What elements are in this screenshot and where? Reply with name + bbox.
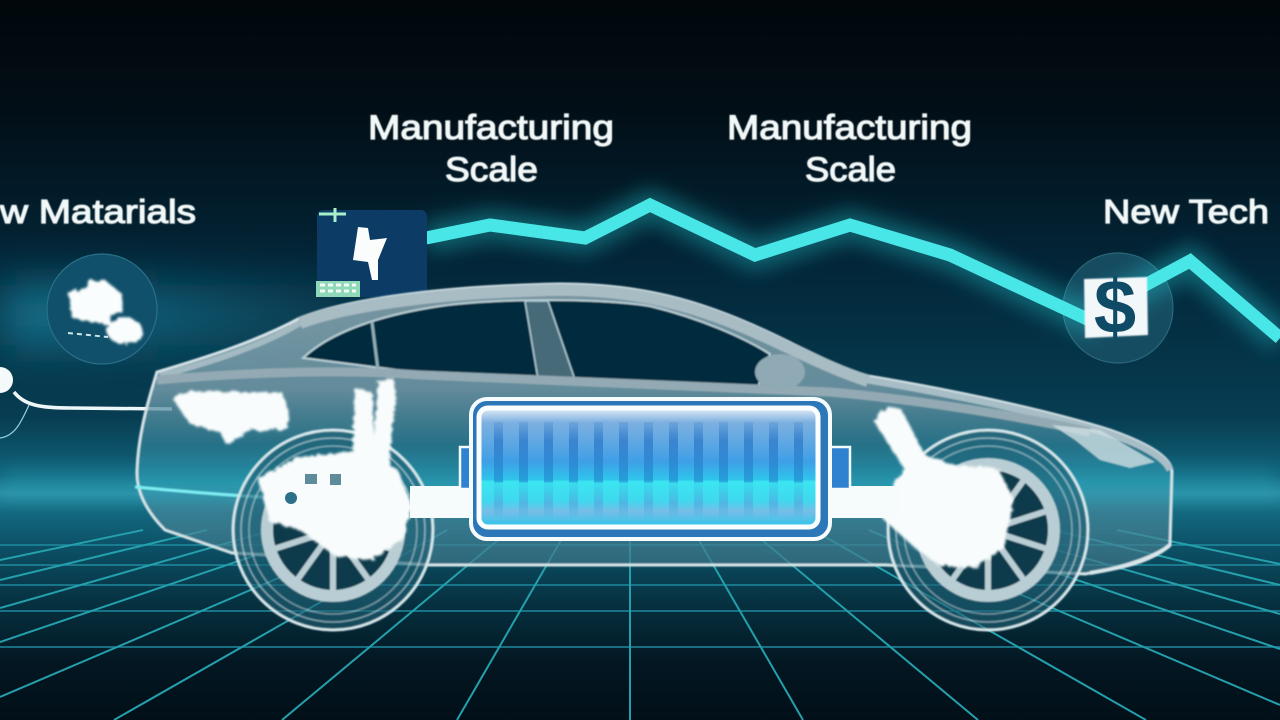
heading: new materials: w Matarials bbox=[0, 193, 196, 230]
car: window pillars bbox=[525, 301, 575, 380]
front suspension parts bbox=[873, 406, 1014, 568]
heading: manufacturing scale left bbox=[368, 109, 614, 189]
heading: manufacturing scale left: Manufacturing bbox=[368, 109, 614, 147]
car: front bumper bbox=[1090, 545, 1170, 573]
battery pack bbox=[460, 399, 850, 539]
axles bbox=[410, 486, 900, 518]
car: hood band bbox=[868, 380, 1170, 470]
rear wheel bbox=[233, 430, 433, 630]
icon: lightning bolt card bbox=[316, 208, 427, 297]
car: rear deck band bbox=[160, 323, 300, 376]
hub cut-outs bbox=[285, 474, 341, 504]
car: body bbox=[135, 284, 1172, 574]
perspective grid floor bbox=[0, 530, 1280, 720]
dollar icon circle bbox=[1063, 253, 1173, 363]
car: window bbox=[303, 300, 770, 387]
icon: dollar sign bbox=[1084, 265, 1148, 350]
car: rear cyan line bbox=[135, 487, 262, 497]
car: roof band bbox=[300, 290, 868, 381]
front wheel bbox=[888, 430, 1088, 630]
car: headlight bbox=[1052, 425, 1155, 468]
heading: manufacturing scale right: Scale bbox=[805, 151, 896, 189]
battery cell stripes bbox=[494, 422, 803, 518]
heading: new tech: New Tech bbox=[1103, 193, 1269, 230]
trend line bbox=[426, 205, 1280, 338]
charging cable bbox=[0, 367, 172, 438]
heading: manufacturing scale right: Manufacturing bbox=[727, 109, 972, 147]
heading: manufacturing scale left: Scale bbox=[445, 151, 538, 189]
car: seat bbox=[755, 354, 805, 390]
rear drivetrain parts bbox=[172, 378, 412, 560]
car: beltline bbox=[157, 372, 1090, 432]
icon: dollar sign: $ bbox=[1094, 265, 1136, 350]
heading: manufacturing scale right bbox=[727, 109, 972, 189]
icon: materials circle bbox=[47, 254, 157, 364]
